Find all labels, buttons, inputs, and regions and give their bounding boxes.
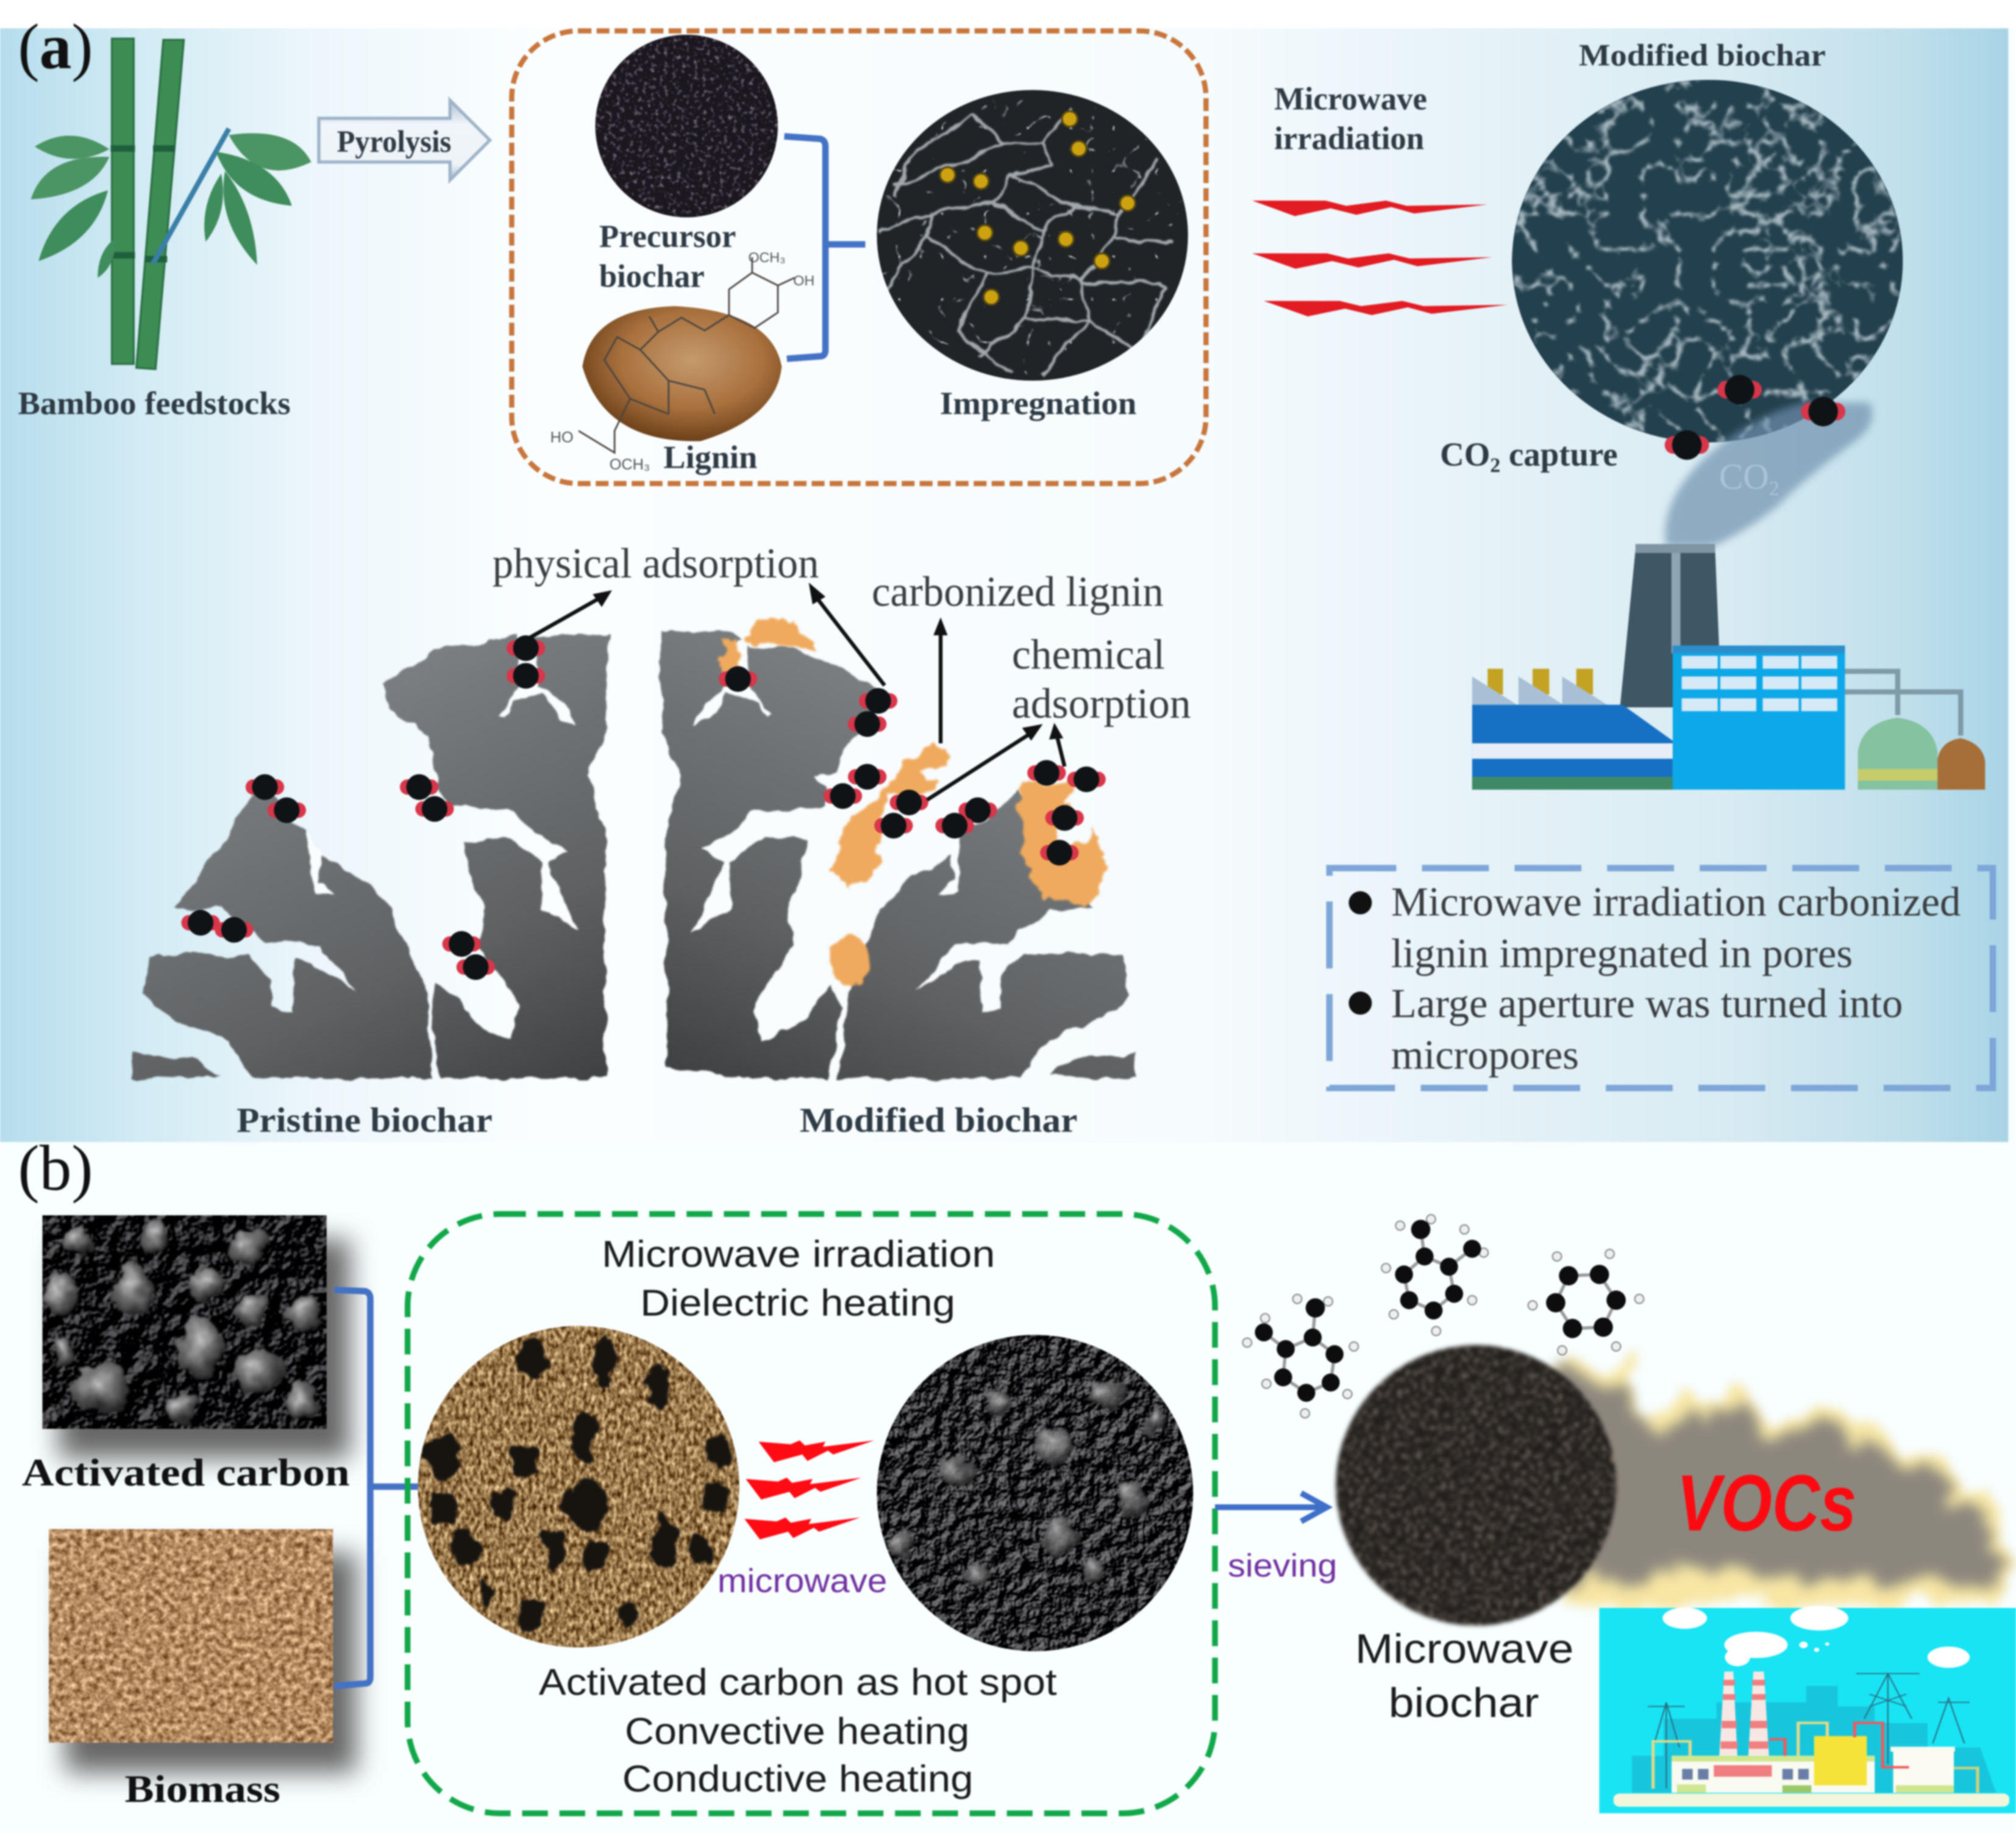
label: carbonized lignin: carbonized lignin	[872, 568, 1164, 615]
smoke: VOC cloud	[1558, 1357, 2007, 1604]
label: chemical adsorption: chemical	[1012, 632, 1165, 679]
photo: biomass and carbon mix	[418, 1326, 739, 1648]
panel a: microwave modified biochar for CO2 capture	[0, 11, 2008, 1142]
label: microwave irradiation: irradiation	[1274, 121, 1424, 157]
label: microwave irradiation: Microwave	[1274, 81, 1427, 116]
text: conductive heating: Conductive heating	[622, 1758, 974, 1799]
label: modified biochar top: Modified biochar	[1579, 38, 1826, 73]
panel: impregnation dashed box	[511, 31, 1206, 484]
bracket: blue joining arrow	[785, 137, 865, 359]
label: precursor biochar: Precursor	[599, 219, 736, 254]
photo: lignin with chemical structure: OCH₃	[748, 249, 785, 265]
label: bamboo feedstocks: Bamboo feedstocks	[18, 386, 291, 421]
label: chemical adsorption: adsorption	[1012, 681, 1191, 727]
arrow: pyrolysis: Pyrolysis	[337, 124, 451, 159]
label: modified biochar bottom: Modified biochar	[800, 1101, 1077, 1140]
label: sieving: sieving	[1228, 1548, 1337, 1584]
photo: activated carbon	[43, 1215, 350, 1459]
photo: modified biochar circle	[1512, 80, 1903, 443]
label: CO2 capture: 2	[1490, 454, 1500, 477]
molecules: adsorbed CO2	[181, 635, 1106, 980]
label: CO2 capture: capture	[1500, 435, 1618, 473]
label: microwave biochar: Microwave	[1355, 1626, 1573, 1672]
photo: biomass	[49, 1529, 356, 1772]
label: VOCs: VOCs	[1676, 1459, 1856, 1548]
icon: microwave bolts	[1252, 201, 1508, 316]
photo: lignin with chemical structure	[550, 249, 814, 473]
arrows: adsorption annotations	[527, 582, 1064, 800]
label: microwave biochar: biochar	[1389, 1681, 1539, 1726]
panel: microwave heating dashed box	[408, 1214, 1215, 1813]
diagram: modified biochar pore cross section	[661, 633, 1136, 1078]
molecules: captured CO2	[1665, 375, 1845, 460]
icon: microwave bolts	[744, 1440, 874, 1540]
text: microwave irradiation: Microwave irradiation	[602, 1233, 995, 1274]
icon: factory	[1472, 544, 1985, 790]
diagram: pristine biochar pore cross section	[132, 633, 608, 1078]
panel b: microwave biochar for VOC adsorption	[18, 1132, 2016, 1813]
molecules: VOC aromatic rings	[1242, 1215, 1644, 1418]
photo: impregnated pores	[877, 90, 1188, 381]
panel label a: (a)	[18, 11, 93, 82]
smoke: CO2 plume	[1665, 402, 1872, 546]
photo: lignin with chemical structure: HO	[550, 429, 574, 446]
text: hot spot: Activated carbon as hot spot	[539, 1662, 1057, 1703]
callout: blue dashed box: lignin impregnated in pores	[1391, 931, 1853, 976]
callout: blue dashed box	[1330, 868, 1993, 1088]
callout: blue dashed box: Large aperture was turned into	[1391, 981, 1903, 1026]
photo: lignin with chemical structure: OH	[793, 273, 814, 288]
arrow: to microwave biochar	[1215, 1493, 1327, 1521]
bracket: blue joining arrow	[334, 1290, 418, 1686]
label: CO2 on plume: 2	[1769, 477, 1779, 500]
photo: char product	[877, 1335, 1193, 1651]
callout: blue dashed box: Microwave irradiation carbonized	[1391, 879, 1961, 925]
label: precursor biochar: biochar	[599, 259, 705, 294]
callout: blue dashed box: micropores	[1391, 1032, 1579, 1078]
label: physical adsorption: physical adsorption	[493, 540, 819, 587]
illustration: clean factory scene	[1599, 1606, 2016, 1813]
label: microwave: microwave	[718, 1562, 887, 1599]
label: CO2 on plume: CO	[1719, 456, 1769, 496]
photo: precursor biochar	[596, 35, 778, 217]
photo: lignin with chemical structure: OCH₃	[610, 456, 650, 473]
photo: microwave biochar	[1336, 1345, 1616, 1626]
label: activated carbon: Activated carbon	[22, 1451, 350, 1494]
arrow: pyrolysis	[319, 101, 490, 180]
label: impregnation: Impregnation	[940, 386, 1136, 421]
icon: bamboo	[31, 38, 311, 369]
text: dielectric heating: Dielectric heating	[640, 1282, 955, 1324]
label: biomass: Biomass	[125, 1768, 280, 1810]
label: lignin: Lignin	[663, 440, 757, 476]
label: CO2 capture: CO	[1440, 435, 1490, 473]
label: pristine biochar: Pristine biochar	[237, 1101, 493, 1140]
panel label b: (b)	[18, 1132, 93, 1204]
blobs: carbonized lignin	[722, 618, 1107, 987]
text: convective heating: Convective heating	[625, 1710, 969, 1752]
